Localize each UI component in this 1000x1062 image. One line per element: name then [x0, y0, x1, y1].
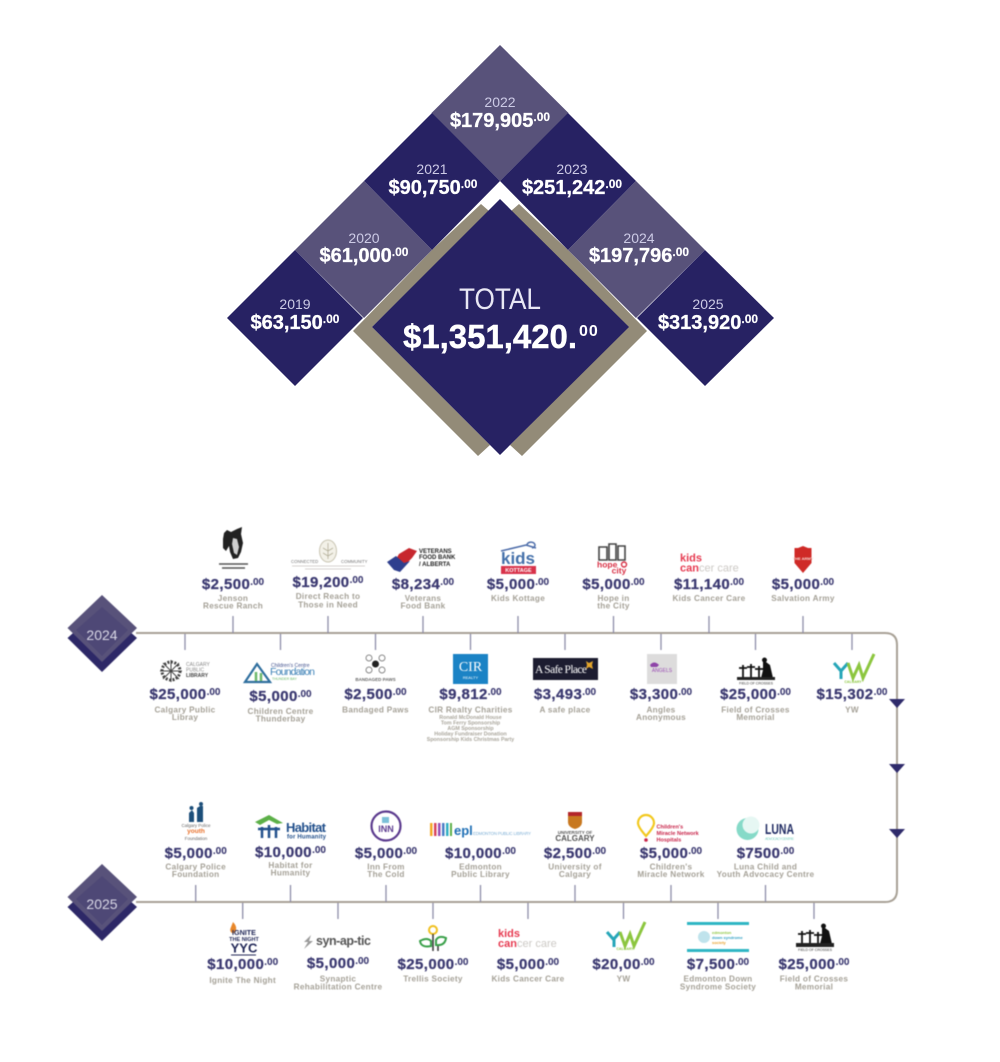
donation: Kids Cancer Care 2025: Kids Cancer Care [491, 974, 565, 984]
donation: Calgary Police Foundation: Foundation [172, 870, 219, 879]
donation: Habitat for Humanity: $10,000 [255, 844, 312, 861]
donation: Children Centre [245, 663, 315, 724]
donation: A Safe Place: $3,493 [534, 686, 582, 703]
total diamond: 00 [579, 323, 599, 340]
donation: CIR Realty [427, 654, 514, 743]
logo: Inn From The Cold: INN [378, 824, 394, 834]
donation: University of Calgary: $2,500 [544, 845, 592, 862]
donation: Field of Crosses 2025: Memorial [795, 982, 833, 992]
logo: Veterans Food Bank: FOOD BANK [419, 555, 456, 561]
total diamond: TOTAL [459, 283, 541, 316]
donation: Hope in the City: the City [597, 602, 630, 610]
donation: YW 2025: .00 [641, 957, 655, 968]
donation: Hope in the City: .00 [631, 577, 645, 588]
total diamond: $1,351,420. [403, 318, 577, 355]
donation: Calgary Public Library: .00 [207, 687, 221, 698]
logo: Field of Crosses: FIELD OF CROSSES [739, 682, 774, 686]
arrow: second [889, 764, 905, 773]
donation: Edmonton Down Syndrome Society: Syndrome Society [680, 982, 756, 992]
logo: horse [219, 527, 248, 568]
donation: University of Calgary: .00 [592, 846, 607, 857]
donation: CIR Realty: $9,812 [439, 686, 488, 703]
year 2022 diamond: $179,905 [450, 110, 533, 132]
tan frame: left [353, 204, 490, 456]
donation: Children's Miracle Network: Children's [650, 862, 692, 872]
donation: YW 2025: $20,00 [592, 956, 641, 973]
logo: Calgary Public Library: LIBRARY [186, 673, 209, 679]
donation: A Safe Place: A safe place [539, 706, 591, 714]
logo: Ignite The Night YYC: IGNITE [232, 928, 256, 937]
logo: Kids Cancer Care: kids [498, 928, 520, 940]
donation: CIR Realty: Tom Ferry Sponsorship [441, 720, 501, 726]
year 2021 diamond: .00 [461, 177, 478, 191]
donation: Kids Kottage: .00 [535, 577, 550, 588]
donation: Angels Anonymous: $3,300 [630, 686, 678, 703]
tick marks 2024 [185, 616, 852, 650]
donation: Trellis Society: .00 [455, 957, 469, 968]
logo: Ignite The Night YYC [229, 922, 259, 956]
donation: Children Centre: Thunderbay [256, 714, 306, 724]
donation: Children Centre: .00 [298, 689, 312, 700]
donation: Trellis Society: $25,000 [398, 956, 455, 973]
donation: Kids Cancer Care: Kids Cancer Care [672, 594, 746, 603]
logo: Luna [736, 816, 794, 841]
logo: Edmonton Public Library: EDMONTON PUBLIC LIBRARY [473, 831, 531, 836]
donation: Children's Miracle Network [637, 815, 705, 879]
logo: YW Calgary: CALGARY [844, 680, 862, 684]
donation: Ignite The Night [207, 922, 279, 985]
logo: Connected Community [291, 540, 368, 569]
donation: University of Calgary: University of [548, 862, 602, 872]
donation: Ignite The Night: .00 [264, 957, 279, 968]
logo: Habitat for Humanity: Habitat [286, 820, 327, 835]
donation: CIR Realty: .00 [488, 687, 502, 698]
donation: Field of Crosses 2024 [720, 658, 791, 722]
donation: YW 2024 [817, 654, 888, 714]
donation: CIR Realty: Ronald McDonald House [439, 715, 502, 721]
logo: University of Calgary [555, 812, 595, 843]
logo: Kids Kottage [501, 542, 536, 574]
logo: Kids Cancer Care: can [498, 938, 517, 950]
year marker 2024 [68, 595, 137, 672]
donation: Synaptic: $5,000 [307, 955, 355, 972]
donation: Synaptic: .00 [355, 956, 370, 967]
logo: Kids Kottage: kids [501, 549, 535, 568]
donation: Luna: $7500 [737, 845, 780, 862]
donation: Calgary Public Library: Libray [172, 713, 198, 722]
year 2024 diamond [568, 181, 705, 318]
donation: Bandaged Paws [342, 655, 409, 714]
donation: A Safe Place [533, 658, 598, 714]
donation: Synaptic: Synaptic [320, 974, 356, 984]
logo: Hope in the City [597, 544, 627, 576]
donation: Kids Cancer Care 2025: $5,000 [497, 956, 545, 973]
donation: Children Centre: $5,000 [249, 688, 298, 705]
donation: Hope in the City: Hope in [597, 594, 630, 603]
logo: Kids Cancer Care: kids [680, 552, 702, 564]
donation: Jenson Rescue Ranch [202, 527, 265, 610]
donation: University of Calgary [544, 812, 607, 879]
donation: Kids Cancer Care 2025: .00 [545, 957, 560, 968]
logo: Kids Cancer Care [680, 552, 739, 574]
logo: Edmonton Public Library [430, 823, 531, 838]
donation: Bandaged Paws: Bandaged Paws [342, 706, 409, 714]
year 2020 diamond: $61,000 [320, 245, 392, 267]
year 2020 diamond [295, 181, 432, 318]
logo: Calgary Police Youth Foundation: Foundation [185, 836, 208, 841]
logo: Children's Centre Foundation: Foundation [270, 666, 315, 678]
logo: University of Calgary: CALGARY [555, 834, 595, 843]
donation: Habitat for Humanity [255, 815, 327, 878]
logo: CIR Realty: REALTY [463, 675, 478, 680]
logo: Children's Miracle Network Hospitals: Children's [656, 824, 683, 830]
donation: Habitat for Humanity: .00 [312, 845, 326, 856]
logo: Kids Cancer Care: cer care [699, 562, 739, 574]
donation: Direct Reach: Direct Reach to [296, 592, 360, 601]
donation: Field of Crosses 2024: .00 [777, 687, 791, 698]
logo: Edmonton Down Syndrome Society: edmonton [712, 930, 732, 935]
donation: YW 2024: .00 [874, 687, 888, 698]
year marker 2024: 2024 [86, 627, 118, 643]
donation: Edmonton Down Syndrome Society [680, 922, 756, 992]
donation: Children's Miracle Network: Miracle Network [637, 870, 705, 879]
logo: CIR Realty: CIR [459, 660, 483, 675]
logo: Veterans Food Bank [387, 548, 456, 572]
logo: Edmonton Down Syndrome Society: society [712, 940, 727, 945]
donation: Field of Crosses 2025: .00 [836, 957, 850, 968]
year 2022 diamond [432, 45, 568, 181]
donation: Salvation Army: .00 [820, 577, 835, 588]
year 2023 diamond: .00 [605, 177, 622, 191]
year 2024 diamond: 2024 [623, 230, 655, 246]
donation: Kids Cancer Care: .00 [730, 577, 744, 588]
donation: Trellis Society [398, 926, 469, 984]
donation: Ignite The Night: Ignite The Night [209, 976, 276, 985]
donation: YW 2024: $15,302 [817, 686, 874, 703]
logo: Kids Cancer Care [498, 928, 557, 950]
donation: Luna: Luna Child and [734, 862, 797, 872]
year 2025 diamond [637, 250, 774, 386]
arrow: first [889, 699, 905, 708]
donation: Veterans Food Bank: Food Bank [400, 602, 446, 610]
logo: Edmonton Down Syndrome Society [687, 922, 749, 952]
donation: Edmonton Down Syndrome Society: $7,500 [687, 956, 735, 973]
year 2020 diamond: 2020 [348, 230, 380, 246]
year 2021 diamond: 2021 [416, 161, 448, 177]
donation: Synaptic [294, 934, 382, 992]
donation: Edmonton Down Syndrome Society: Edmonton Down [684, 974, 752, 984]
logo: Field of Crosses: FIELD OF CROSSES [798, 948, 833, 952]
donation: Salvation Army: $5,000 [772, 576, 820, 593]
donation: Calgary Police Foundation: Calgary Police [165, 862, 226, 872]
donation: YW 2025 [592, 922, 655, 984]
year 2023 diamond: $251,242 [522, 177, 605, 199]
logo: Habitat for Humanity: for Humanity [287, 834, 327, 840]
donation: CIR Realty: CIR Realty Charities [428, 706, 513, 714]
logo: Children's Miracle Network Hospitals: Hospitals [656, 838, 681, 844]
logo: Veterans Food Bank: / ALBERTA [419, 562, 451, 568]
donation: Kids Cancer Care 2025 [491, 928, 565, 984]
logo: Connected Community: CONNECTED [291, 559, 318, 564]
donation: A Safe Place: .00 [582, 687, 597, 698]
donation: Edmonton Public Library: Public Library [451, 870, 510, 879]
donation: Field of Crosses 2025 [779, 923, 850, 992]
logo: Calgary Public Library: CALGARY [186, 662, 210, 668]
logo: Veterans Food Bank: VETERANS [419, 549, 452, 555]
logo: University of Calgary: UNIVERSITY OF [558, 830, 592, 835]
year 2024 diamond: .00 [672, 245, 689, 259]
donation: Habitat for Humanity: Habitat for [268, 861, 313, 870]
donation: Ignite The Night: $10,000 [207, 956, 264, 973]
year 2025 diamond: 2025 [692, 296, 724, 312]
donation: Edmonton Public Library: $10,000 [445, 845, 502, 862]
logo: Kids Kottage: KOTTAGE [505, 568, 532, 574]
logo: Edmonton Down Syndrome Society: down syndrome [712, 935, 743, 940]
year 2022 diamond: .00 [533, 110, 550, 124]
donation: Calgary Public Library: Calgary Public [154, 706, 216, 714]
logo: Calgary Public Library [160, 660, 210, 682]
donation: Field of Crosses 2025: Field of Crosses [780, 974, 848, 984]
logo: Children's Centre Foundation [245, 663, 315, 682]
year 2021 diamond [364, 113, 500, 250]
timeline path [136, 633, 897, 902]
logo: Edmonton Public Library: epl [454, 823, 473, 838]
donation: Calgary Public Library [150, 660, 221, 722]
year marker 2025: 2025 [86, 896, 118, 912]
donation: Inn From The Cold: Inn From [367, 862, 405, 872]
logo: Calgary Police Youth Foundation [181, 802, 211, 841]
donation: Calgary Police Foundation: .00 [213, 846, 227, 857]
donation: Jenson Rescue Ranch: .00 [250, 577, 265, 588]
donation: Children Centre: Children Centre [248, 707, 314, 716]
logo: Children's Miracle Network Hospitals [638, 815, 700, 844]
year 2020 diamond: .00 [392, 245, 409, 259]
donation: Bandaged Paws: $2,500 [344, 686, 393, 703]
donation: University of Calgary: Calgary [559, 870, 591, 879]
year 2024 diamond: $197,796 [589, 245, 672, 267]
donation: Angels Anonymous: Angles [646, 706, 676, 714]
logo: Hope in the City: city [612, 566, 627, 576]
year 2019 diamond [227, 250, 363, 386]
donation: Kids Kottage: $5,000 [487, 576, 535, 593]
donation: Kids Cancer Care: $11,140 [674, 576, 730, 593]
logo: CIR Realty [453, 654, 488, 684]
logo: Calgary Police Youth Foundation: youth [187, 828, 205, 835]
tick marks 2025 [196, 885, 814, 919]
donation: Kids Cancer Care [672, 552, 746, 603]
logo: Luna: ADVOCACY CENTRE [765, 837, 794, 841]
donation: YW 2024: YW [845, 706, 859, 714]
donation: Children's Miracle Network: $5,000 [640, 845, 688, 862]
logo: Children's Centre Foundation: THUNDER BAY [272, 677, 297, 681]
logo: Habitat for Humanity [255, 815, 327, 840]
year 2023 diamond: 2023 [556, 161, 588, 177]
donation: YW 2025: YW [617, 974, 630, 984]
donation: Calgary Police Foundation [165, 802, 227, 879]
year 2025 diamond: .00 [741, 312, 758, 326]
logo: Connected Community: COMMUNITY [341, 559, 368, 564]
donation: Luna: .00 [780, 846, 795, 857]
logo: YW Calgary: CALGARY [616, 947, 634, 951]
arrow: third [889, 829, 905, 838]
logo: A Safe Place: A Safe Place [535, 664, 587, 676]
logo: Children's Miracle Network Hospitals: Miracle Network [656, 831, 700, 837]
donation: Edmonton Public Library: .00 [502, 846, 516, 857]
donation: Children's Miracle Network: .00 [688, 846, 703, 857]
donation: Direct Reach [291, 540, 368, 610]
timelines [68, 527, 905, 992]
logo: Luna: LUNA [765, 821, 794, 838]
donation: Veterans Food Bank [387, 548, 456, 610]
donation: Jenson Rescue Ranch: $2,500 [202, 576, 250, 593]
donation: Salvation Army [771, 546, 835, 603]
donation: Hope in the City [582, 544, 645, 610]
donation: Salvation Army: Salvation Army [771, 594, 835, 603]
donation: Inn From The Cold [355, 812, 418, 879]
donation: Field of Crosses 2024: Memorial [736, 713, 775, 722]
logo: Calgary Public Library: PUBLIC [186, 668, 204, 674]
logo: Salvation Army shield: THE ARMY [793, 556, 814, 561]
donation: Synaptic: Rehabilitation Centre [294, 982, 382, 992]
donation: Calgary Police Foundation: $5,000 [165, 845, 213, 862]
donation: Kids Kottage [487, 542, 550, 603]
logo: Kids Cancer Care: cer care [517, 938, 557, 950]
donation: CIR Realty: AGM Sponsorship [447, 726, 494, 732]
donation: Veterans Food Bank: Veterans [405, 594, 441, 603]
logo: Kids Cancer Care: can [680, 562, 699, 574]
donation: Hope in the City: $5,000 [582, 576, 631, 593]
donation: Angels Anonymous [630, 654, 693, 722]
donation: CIR Realty: Holiday Fundraiser Donation [434, 732, 507, 738]
donation: CIR Realty: Sponsorship Kids Christmas Party [427, 737, 514, 743]
year 2019 diamond: 2019 [279, 296, 311, 312]
logo: Ignite The Night YYC: THE NIGHT [229, 937, 259, 943]
tan frame: right [510, 204, 647, 456]
donation: Inn From The Cold: The Cold [367, 870, 405, 879]
donation: Inn From The Cold: $5,000 [355, 845, 403, 862]
donation: Edmonton Down Syndrome Society: .00 [735, 957, 750, 968]
logo: Angels Anonymous: ANGELS [652, 668, 673, 674]
year marker 2025 [68, 864, 137, 941]
donation: Jenson Rescue Ranch: Rescue Ranch [203, 602, 263, 610]
donation: Kids Kottage: Kids Kottage [491, 594, 545, 603]
donation: Field of Crosses 2024: Field of Crosses [721, 706, 790, 714]
donation: Edmonton Public Library [430, 823, 531, 879]
donation: Veterans Food Bank: $8,234 [392, 576, 440, 593]
donation: Habitat for Humanity: Humanity [271, 868, 310, 878]
donation: Jenson Rescue Ranch: Jenson [218, 594, 248, 603]
donation: Field of Crosses 2024: $25,000 [720, 686, 777, 703]
donation: Edmonton Public Library: Edmonton [459, 862, 502, 872]
donation: Field of Crosses 2025: $25,000 [779, 956, 836, 973]
year 2025 diamond: $313,920 [658, 312, 741, 334]
donation: Luna: Youth Advocacy Centre [717, 870, 815, 879]
year 2022 diamond: 2022 [484, 94, 516, 110]
donation: Angels Anonymous: .00 [678, 687, 693, 698]
logo: Calgary Police Youth Foundation: Calgary Police [181, 823, 211, 828]
donation: Direct Reach: .00 [350, 575, 364, 586]
logo: synaptic: syn-ap-tic [316, 934, 371, 948]
total diamond [372, 199, 629, 455]
donation: Calgary Public Library: $25,000 [150, 686, 207, 703]
donation: Trellis Society: Trellis Society [403, 974, 463, 984]
year 2021 diamond: $90,750 [389, 177, 461, 199]
logo: Children's Centre Foundation: Children's Centre [271, 663, 310, 669]
donation: Veterans Food Bank: .00 [440, 577, 455, 588]
donation: Bandaged Paws: .00 [393, 687, 407, 698]
logo: Ignite The Night YYC: YYC [231, 940, 258, 956]
donation: Angels Anonymous: Anonymous [636, 713, 686, 722]
year 2019 diamond: $63,150 [251, 312, 323, 334]
donation: Inn From The Cold: .00 [403, 846, 418, 857]
year 2019 diamond: .00 [323, 312, 340, 326]
diamond chart: yearly totals [227, 45, 774, 456]
donation: Direct Reach: Those in Need [298, 600, 358, 610]
logo: Trellis [420, 926, 446, 951]
year 2023 diamond [500, 113, 636, 250]
logo: Hope in the City: hope [597, 560, 618, 570]
donation: Luna [717, 816, 815, 879]
donation: Direct Reach: $19,200 [293, 574, 350, 591]
logo: Bandaged Paws: BANDAGED PAWS [355, 677, 396, 682]
